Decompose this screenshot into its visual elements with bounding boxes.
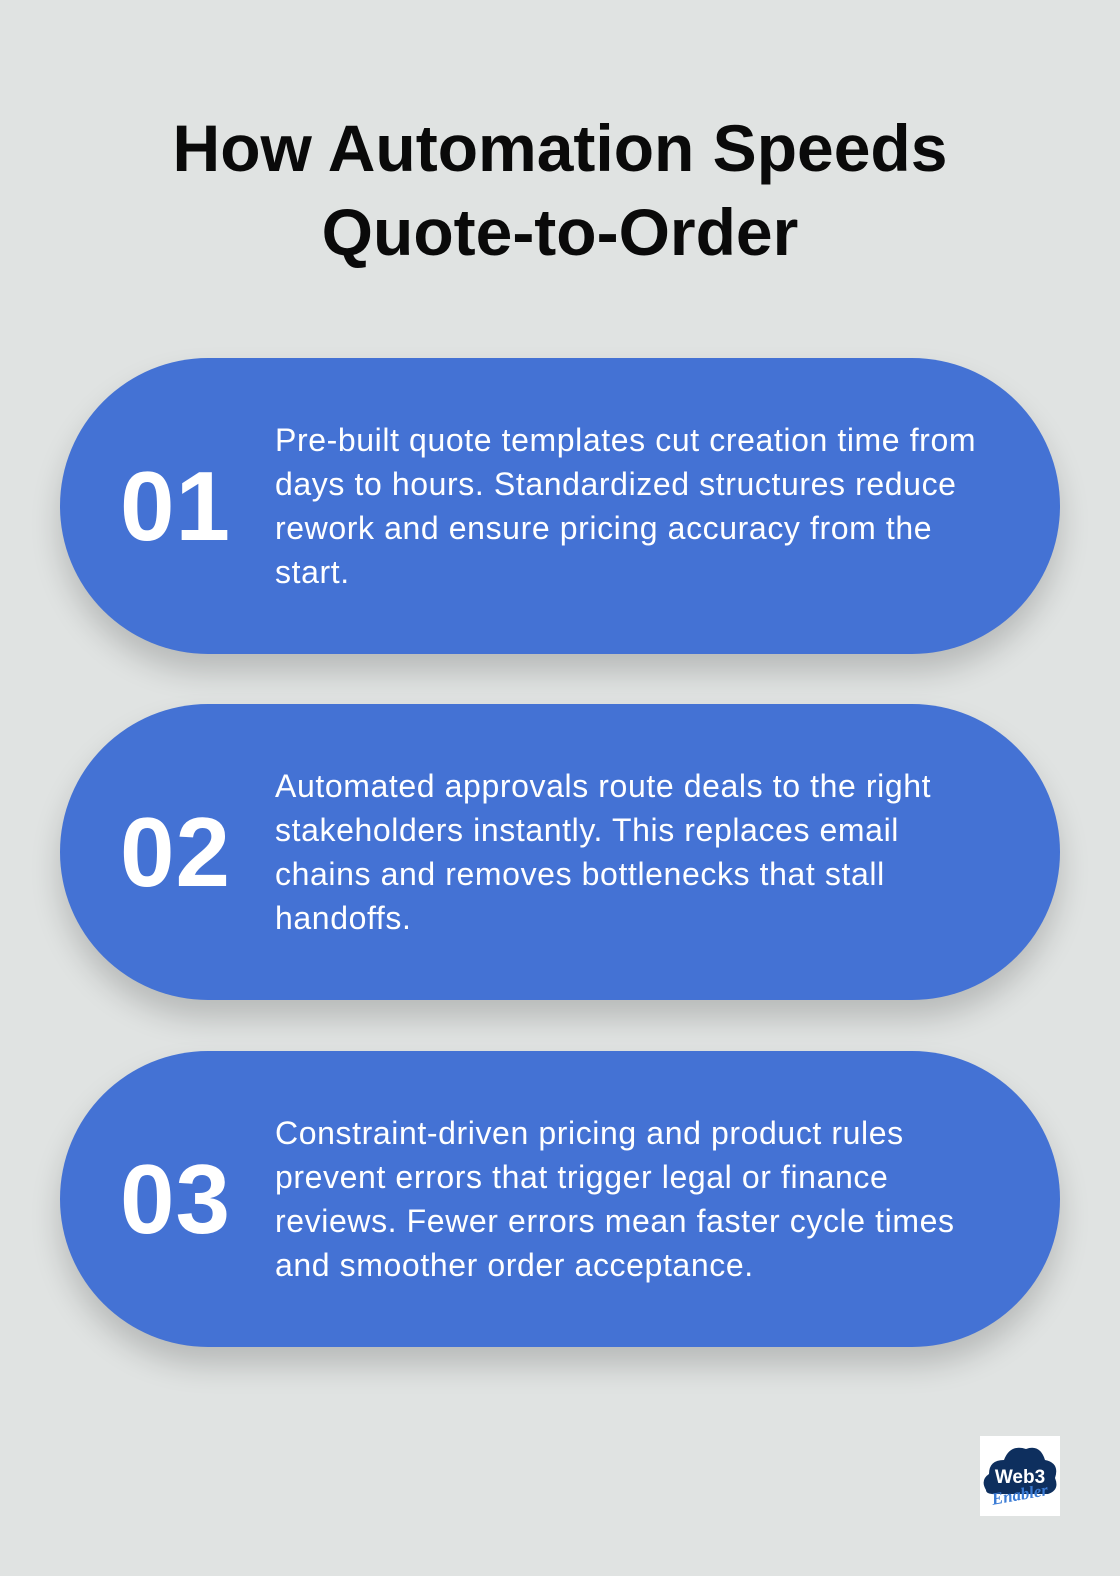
panel: step 03 [60, 1051, 1060, 1347]
logo: Web3 Enabler [980, 1436, 1060, 1516]
text: step 02: chains and removes bottlenecks that stall [275, 856, 885, 892]
text: step 03: prevent errors that trigger legal or finance [275, 1159, 888, 1195]
text: step 01: days to hours. Standardized structures reduce [275, 466, 957, 502]
text: step 02 [275, 768, 931, 936]
text: step 01 [275, 422, 976, 590]
logo: Web3 Enabler: Web3 [995, 1467, 1045, 1488]
text: step 01: rework and ensure pricing accuracy from the [275, 510, 932, 546]
number 01: 01 [120, 451, 231, 561]
text: step 01: Pre-built quote templates cut creation time from [275, 422, 976, 458]
logo: Web3 Enabler: Enabler [989, 1480, 1050, 1509]
text: step 01: start. [275, 554, 350, 590]
text: step 02: handoffs. [275, 900, 411, 936]
text: step 03 [275, 1115, 955, 1283]
title: Quote-to-Order [322, 195, 798, 269]
text: step 02: stakeholders instantly. This replaces email [275, 812, 899, 848]
title: How Automation Speeds [173, 111, 947, 185]
panel: step 01 [60, 358, 1060, 654]
number 02: 02 [120, 797, 231, 907]
number 03: 03 [120, 1144, 231, 1254]
panel: step 02 [60, 704, 1060, 1000]
text: step 03: and smoother order acceptance. [275, 1247, 754, 1283]
text: step 03: Constraint-driven pricing and product rules [275, 1115, 904, 1151]
text: step 02: Automated approvals route deals to the right [275, 768, 931, 804]
text: step 03: reviews. Fewer errors mean faster cycle times [275, 1203, 955, 1239]
title [173, 111, 947, 269]
